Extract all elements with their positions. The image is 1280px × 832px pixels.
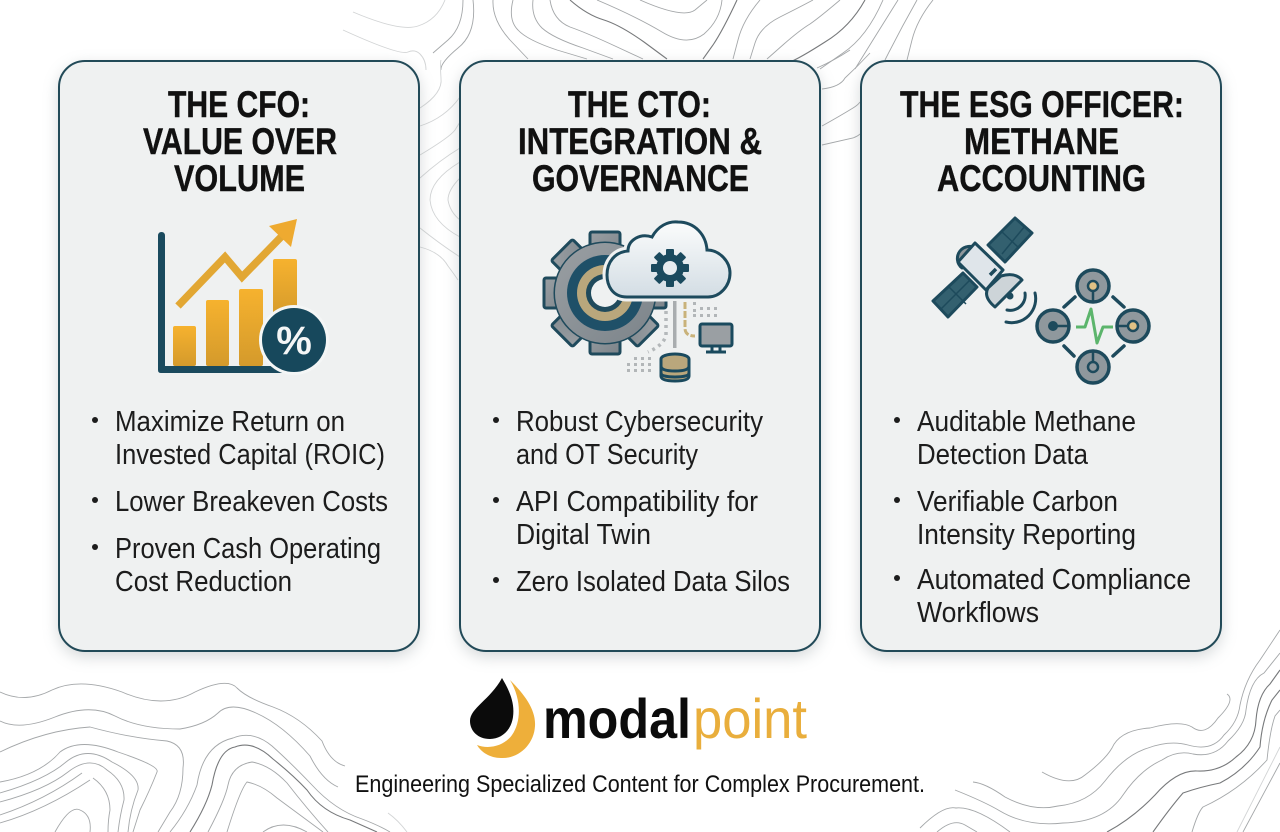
- icon: satellite and sensor network: [933, 218, 1149, 383]
- bullet list: ESG Officer: Detection Data: [917, 439, 1089, 471]
- bullet list: ESG Officer: Intensity Reporting: [917, 519, 1136, 551]
- heading: CTO: GOVERNANCE: [532, 158, 749, 199]
- bullet list: CFO: Lower Breakeven Costs: [115, 486, 388, 518]
- bullet list: CFO: Cost Reduction: [115, 566, 292, 598]
- bullet list: ESG Officer: Verifiable Carbon: [917, 486, 1118, 518]
- heading: CTO: INTEGRATION &: [518, 121, 762, 162]
- bullet list: CTO: API Compatibility for: [516, 486, 758, 518]
- logo: Modal Point: [470, 678, 807, 758]
- icon: gear, cloud, monitor and database: [544, 222, 732, 381]
- bullet list: CTO: Zero Isolated Data Silos: [516, 566, 790, 598]
- icon: oil drop: [470, 678, 535, 758]
- bullet list: CTO: Robust Cybersecurity: [516, 406, 763, 438]
- icon: bar chart with rising arrow and percent badge: [158, 219, 329, 375]
- bullet list: CFO: Maximize Return on: [115, 406, 345, 438]
- panel: CTO: [460, 61, 820, 656]
- tagline: Engineering Specialized Content for Complex Procurement.: [355, 771, 925, 798]
- bullet list: CTO: [493, 406, 790, 598]
- heading: CFO: VALUE OVER: [143, 121, 337, 162]
- heading: CFO: VOLUME: [174, 158, 305, 199]
- icon: bar chart with rising arrow and percent badge: %: [276, 319, 312, 363]
- heading: CTO: [518, 84, 762, 199]
- logo: Modal Point: point: [693, 687, 807, 750]
- panel: CFO: [59, 61, 419, 656]
- heading: ESG Officer: METHANE: [964, 121, 1119, 162]
- panel: ESG Officer: [861, 61, 1221, 656]
- bullet list: ESG Officer: Auditable Methane: [917, 406, 1136, 438]
- heading: CTO: THE CTO:: [568, 84, 711, 125]
- bullet list: ESG Officer: Workflows: [917, 597, 1039, 629]
- heading: ESG Officer: [900, 84, 1184, 199]
- heading: ESG Officer: ACCOUNTING: [937, 158, 1146, 199]
- bullet list: CTO: and OT Security: [516, 439, 698, 471]
- bullet list: CFO: [92, 406, 388, 598]
- heading: ESG Officer: THE ESG OFFICER:: [900, 84, 1184, 125]
- bullet list: ESG Officer: Automated Compliance: [917, 564, 1191, 596]
- bullet list: CFO: Invested Capital (ROIC): [115, 439, 385, 471]
- heading: CFO: [143, 84, 337, 199]
- heading: CFO: THE CFO:: [168, 84, 310, 125]
- wordmark: modal: [543, 687, 691, 750]
- bullet list: CFO: Proven Cash Operating: [115, 533, 381, 565]
- bullet list: ESG Officer: [894, 406, 1191, 629]
- bullet list: CTO: Digital Twin: [516, 519, 651, 551]
